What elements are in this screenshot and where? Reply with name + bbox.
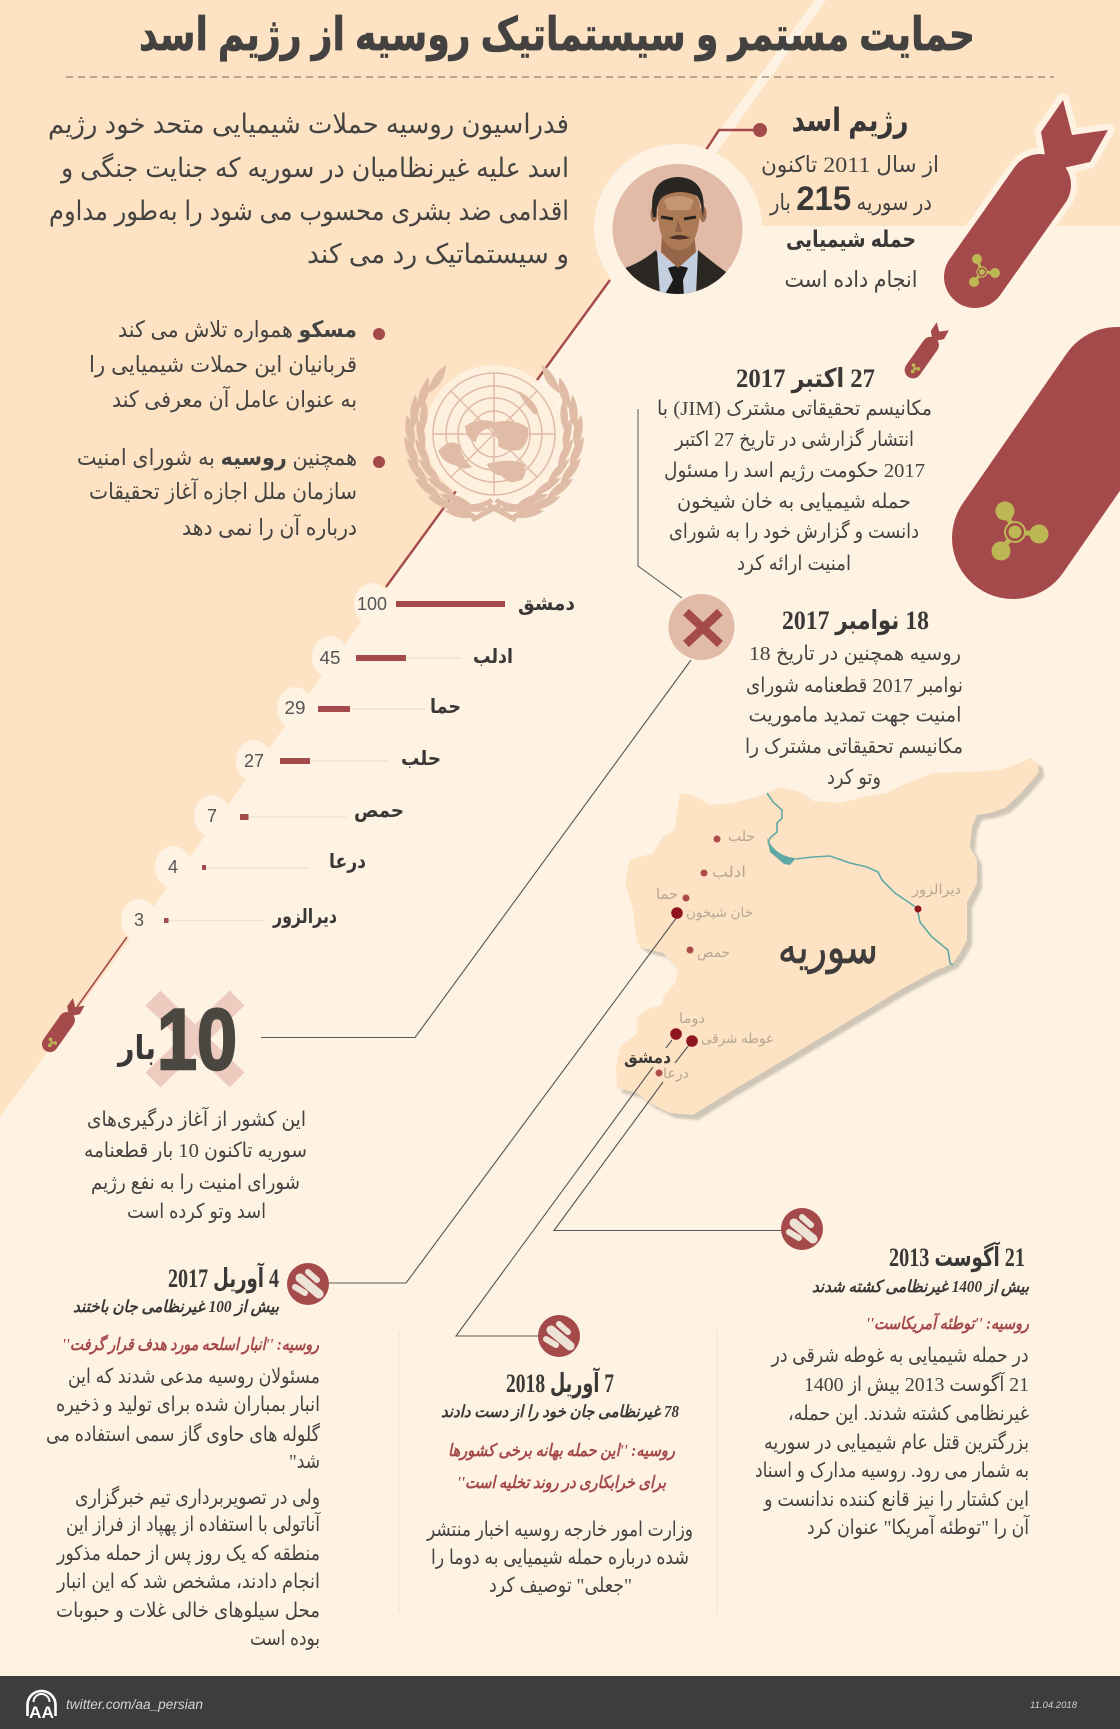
text block: 7 april 2018: شده درباره حمله شیمیایی به دوما را <box>431 1547 689 1569</box>
regime assad text block: در سوریه 215 بار <box>769 180 932 218</box>
city names <box>272 593 575 928</box>
text block: 21 august 2013: 21 آگوست 2013 بیش از 1400 <box>804 1371 1029 1396</box>
city labels: دمشق <box>624 1048 671 1068</box>
city labels: دیرالزور <box>911 883 961 898</box>
bullet list: درباره آن را نمی دهد <box>182 513 357 540</box>
text block: 27 october 2017 <box>657 364 932 575</box>
connector: khan sheikhoun to 4 april <box>329 917 677 1283</box>
text block: 21 august 2013: 21 آگوست 2013 <box>889 1241 1025 1273</box>
bullet list: همچنین روسیه به شورای امنیت <box>77 445 357 471</box>
city dots <box>656 836 922 1076</box>
text block: 4 april 2017 <box>46 1262 321 1650</box>
city names: حما <box>430 696 461 718</box>
footer bar <box>0 1676 1120 1729</box>
city names: دیرالزور <box>272 906 337 928</box>
city names: حمص <box>354 800 404 822</box>
background: top right peach block <box>664 0 1120 226</box>
text block: 7 april 2018: "جعلی" توصیف کرد <box>489 1575 632 1597</box>
bullet list: به عنوان عامل آن معرفی کند <box>112 385 357 413</box>
portrait: Assad <box>594 144 762 294</box>
footer handle: twitter.com/aa_persian <box>66 1697 203 1712</box>
city names: ادلب <box>473 646 513 668</box>
icon: veto cross <box>668 594 734 660</box>
title: حمایت مستمر و سیستماتیک روسیه از رژیم اسد <box>139 9 975 61</box>
track lines <box>164 658 461 920</box>
attack dots on map <box>670 907 698 1047</box>
text block: 4 april 2017: انبار بمباران شده برای تولید و ذخیره <box>56 1394 320 1416</box>
text block: 27 october 2017: 2017 حکومت رژیم اسد را مسئول <box>664 460 925 482</box>
river euphrates <box>767 793 953 965</box>
bars <box>164 601 505 923</box>
connector: douma to 7 april <box>456 1067 653 1336</box>
values: 27 <box>244 751 264 771</box>
values: 29 <box>284 698 306 718</box>
city labels <box>624 830 961 1082</box>
bumps <box>121 583 390 941</box>
text block: 18 november 2017 <box>745 606 963 789</box>
regime assad text block: رژیم اسد <box>792 102 908 139</box>
text block: 21 august 2013: به شمار می رود. روسیه مدارک و اسناد <box>755 1460 1029 1482</box>
icon: huge bomb <box>992 388 1117 560</box>
icon: attack badge 4 april <box>287 1263 329 1305</box>
connector: 27 october to veto <box>638 409 682 598</box>
bullet dot 1 <box>373 328 385 340</box>
text block: 21 august 2013: بزرگترین قتل عام شیمیایی در سوریه <box>764 1430 1029 1454</box>
text block: veto description: سوریه تاکنون 10 بار قطعنامه <box>84 1140 307 1162</box>
text block: 4 april 2017: محل سیلوهای خالی غلات و حبوبات <box>56 1600 320 1622</box>
city labels: حلب <box>728 830 755 845</box>
map shadow <box>621 763 1044 1120</box>
text block: 18 november 2017: وتو کرد <box>827 767 881 789</box>
text block: 7 april 2018: 7 آوریل 2018 <box>506 1367 614 1399</box>
text block: 21 august 2013: در حمله شیمیایی به غوطه شرقی در <box>771 1345 1028 1367</box>
city labels: دوما <box>679 1012 705 1027</box>
bullet dot 2 <box>373 456 385 468</box>
intro text block: و سیستماتیک رد می کند <box>307 239 569 270</box>
footer date: 11.04.2018 <box>1030 1700 1078 1711</box>
icon: small bomb <box>911 322 949 373</box>
text block: veto description: اسد وتو کرده است <box>127 1201 266 1223</box>
intro text block: اسد علیه غیرنظامیان در سوریه که جنایت جنگی و <box>60 152 569 184</box>
icon: large bomb <box>969 100 1108 287</box>
bullet list: سازمان ملل اجازه آغاز تحقیقات <box>89 477 357 504</box>
background: left peach diagonal <box>0 0 815 1117</box>
icon: attack badge august <box>781 1208 823 1250</box>
text block: 4 april 2017: مسئولان روسیه مدعی شدند که این <box>68 1366 320 1388</box>
text block: 21 august 2013: بیش از 1400 غیرنظامی کشته شدند <box>812 1277 1029 1297</box>
text block: veto description: این کشور از آغاز درگیری‌های <box>87 1106 306 1131</box>
icon: bottom left bomb <box>48 998 85 1047</box>
icon: AA logo <box>28 1691 56 1722</box>
text block: 18 november 2017: 18 نوامبر 2017 <box>782 606 929 636</box>
text block: 4 april 2017: روسیه: ''انبار اسلحه مورد هدف قرار گرفت'' <box>62 1334 320 1355</box>
text block: 21 august 2013: غیرنظامی کشته شدند. این حمله، <box>788 1403 1029 1425</box>
text block: 18 november 2017: امنیت جهت تمدید ماموریت <box>748 704 962 726</box>
text block: 27 october 2017: انتشار گزارشی در تاریخ 27 اکتبر <box>674 427 914 451</box>
text block: veto description: شورای امنیت را به نفع رژیم <box>91 1172 300 1194</box>
city labels: ادلب <box>712 865 746 881</box>
text block: 7 april 2018: برای خرابکاری در روند تخلیه است'' <box>457 1473 666 1493</box>
text block: 4 april 2017: انجام دادند، مشخص شد که این انبار <box>56 1571 320 1593</box>
text block: 4 april 2017: آناتولی با استفاده از پهپاد از فراز این <box>66 1511 321 1536</box>
big number: 10 vetoes: بار <box>116 1031 156 1067</box>
text block: 4 april 2017: ولی در تصویربرداری تیم خبرگزاری <box>75 1485 320 1509</box>
text block: 21 august 2013: آن را "توطئه آمریکا" عنوان کرد <box>807 1514 1030 1539</box>
intro text block: اقدامی ضد بشری محسوب می شود را به‌طور مداوم <box>49 196 569 227</box>
city names: درعا <box>329 851 366 873</box>
city labels: خان شیخون <box>686 906 753 921</box>
text block: 18 november 2017: نوامبر 2017 قطعنامه شورای <box>746 675 963 697</box>
text block: 7 april 2018: روسیه: ''این حمله بهانه برخی کشورها <box>448 1441 676 1461</box>
connector: ghouta to 21 august <box>554 1082 781 1230</box>
text block: 4 april 2017: 4 آوریل 2017 <box>168 1262 279 1294</box>
regime assad text block: از سال 2011 تاکنون <box>761 152 939 178</box>
values: 3 <box>134 910 144 930</box>
text block: 27 october 2017: مکانیسم تحقیقاتی مشترک (JIM) با <box>657 398 932 420</box>
text block: 4 april 2017: بوده است <box>250 1628 320 1650</box>
text block: 4 april 2017: بیش از 100 غیرنظامی جان باختند <box>73 1297 279 1317</box>
text block: 27 october 2017: امنیت ارائه کرد <box>737 553 851 575</box>
text block: 7 april 2018: 78 غیرنظامی جان خود را از دست دادند <box>441 1402 679 1422</box>
chemical symbol <box>992 502 1048 560</box>
text block: 27 october 2017: 27 اکتبر 2017 <box>736 364 875 394</box>
big number: 10 vetoes: 10 <box>157 992 237 1088</box>
map: syria <box>616 758 1044 1120</box>
text block: 18 november 2017: مکانیسم تحقیقاتی مشترک را <box>745 736 963 758</box>
regime assad text block: انجام داده است <box>784 267 918 292</box>
map land <box>616 758 1039 1115</box>
text block: 4 april 2017: گلوله های حاوی گاز سمی استفاده می <box>46 1422 320 1446</box>
map country label: سوریه <box>778 922 878 975</box>
text block: 4 april 2017: شد" <box>289 1451 320 1473</box>
city names: حلب <box>401 748 441 770</box>
bullet list: قربانیان این حملات شیمیایی را <box>89 352 357 378</box>
values <box>134 594 387 930</box>
text block: 21 august 2013: روسیه: ''توطئه آمریکاست'' <box>866 1312 1030 1334</box>
text block: 7 april 2018 <box>426 1367 693 1597</box>
bullet list: مسکو همواره تلاش می کند <box>118 317 357 343</box>
regime assad text block <box>761 102 939 292</box>
text block: veto description <box>84 1106 307 1223</box>
timeline red line <box>77 130 760 1007</box>
city labels: غوطه شرقی <box>701 1032 773 1047</box>
values: 4 <box>168 857 178 877</box>
city labels: حمص <box>697 946 730 961</box>
chemical symbol <box>969 254 1000 287</box>
icon: AA logo: AA <box>29 1703 54 1722</box>
text block: 21 august 2013 <box>755 1241 1030 1539</box>
text block: 27 october 2017: دانست و گزارش خود را به شورای <box>669 519 919 543</box>
values: 100 <box>357 594 387 614</box>
values: 45 <box>320 648 340 668</box>
text block: 21 august 2013: این کشتار را نیز قانع کننده ندانست و <box>763 1489 1029 1511</box>
bullet list <box>77 317 385 540</box>
city names: دمشق <box>518 593 575 615</box>
bar chart: attacks by city <box>121 583 575 941</box>
icon: attack badge 7 april <box>538 1315 580 1357</box>
values: 7 <box>207 806 217 826</box>
big number: 10 vetoes <box>116 992 237 1088</box>
connector stubs near map <box>666 1040 689 1063</box>
intro text block <box>48 109 569 270</box>
text block: 18 november 2017: روسیه همچنین در تاریخ 18 <box>749 643 961 665</box>
connector: veto to 10 times <box>261 660 691 1038</box>
regime marker dot <box>753 123 767 137</box>
text block: 27 october 2017: حمله شیمیایی به خان شیخون <box>677 491 911 513</box>
text block: 4 april 2017: منطقه که یک روز پس از حمله مذکور <box>56 1543 320 1565</box>
text block: 7 april 2018: وزارت امور خارجه روسیه اخبار منتشر <box>426 1519 693 1541</box>
city labels: حما <box>656 887 678 903</box>
icon: UN emblem <box>403 364 585 524</box>
regime assad text block: حمله شیمیایی <box>786 227 916 252</box>
intro text block: فدراسیون روسیه حملات شیمیایی متحد خود رژیم <box>48 109 569 140</box>
city labels: درعا <box>663 1067 689 1082</box>
